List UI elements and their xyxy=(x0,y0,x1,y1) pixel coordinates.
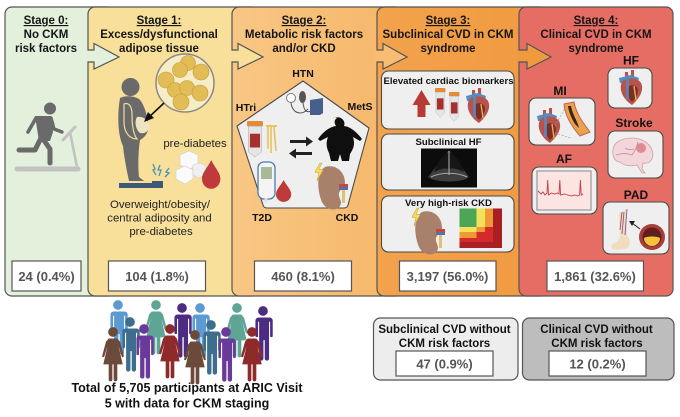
arrow: Stage 3 to Stage 4 xyxy=(518,44,551,69)
label: Stroke: Stroke xyxy=(615,116,653,130)
icon: heart xyxy=(537,108,560,143)
label: HTri: HTri xyxy=(236,102,256,114)
panel: clinical CVD without risk factors xyxy=(522,318,674,380)
icon: leg with arteries xyxy=(611,209,630,250)
Stage 4 count: 1,861 (32.6%) xyxy=(554,269,636,284)
icon: heart xyxy=(466,88,489,123)
Stage 2 heading: Metabolic risk factors xyxy=(245,29,363,41)
panel: subclinical CVD without risk factors xyxy=(374,318,518,380)
icon: exchange arrows xyxy=(289,136,313,158)
label: PAD: PAD xyxy=(624,188,649,202)
card: PAD xyxy=(603,188,669,254)
panel: Stage 1 xyxy=(86,7,258,296)
arrow: Stage 2 to Stage 3 xyxy=(376,44,407,69)
panel: Stage 0 xyxy=(5,7,115,296)
card label: Elevated cardiac biomarkers xyxy=(383,76,514,87)
Stage 3 heading: Subclinical CVD in CKM xyxy=(382,29,514,41)
panel heading: CKM risk factors xyxy=(399,338,490,350)
arrow: magnified adipose to abdomen xyxy=(144,103,164,122)
caption: total participants: 5 with data for CKM staging xyxy=(105,396,269,410)
caption: total participants: Total of 5,705 participants at ARIC Visit xyxy=(71,381,303,395)
Stage 2 heading: Stage 2: xyxy=(282,15,326,27)
card label: Subclinical HF xyxy=(415,137,482,148)
label: pre-diabetes: pre-diabetes xyxy=(163,138,227,150)
icon: kidney xyxy=(315,163,348,209)
Stage 3 count xyxy=(400,261,496,291)
count xyxy=(549,351,646,376)
icon: blood tube and lipids xyxy=(247,121,277,157)
count: 47 (0.9%) xyxy=(416,356,473,372)
Stage 3 count: 3,197 (56.0%) xyxy=(407,269,488,284)
Stage 2 count: 460 (8.1%) xyxy=(271,269,335,284)
label: MetS: MetS xyxy=(347,101,373,113)
icon: blocked artery xyxy=(554,102,590,138)
panel: Stage 4 xyxy=(517,7,673,296)
Stage 1 count: 104 (1.8%) xyxy=(125,269,189,284)
Stage 2 heading: and/or CKD xyxy=(272,43,336,55)
card: AF xyxy=(532,152,597,214)
Stage 1 heading: adipose tissue xyxy=(119,43,199,55)
Stage 4 count xyxy=(547,261,644,291)
label: MI: MI xyxy=(553,84,567,98)
card: HF xyxy=(608,54,652,108)
icon: artery cross section xyxy=(629,221,665,250)
icon: participants group xyxy=(102,300,273,384)
Stage 0 count: 24 (0.4%) xyxy=(18,269,75,284)
panel heading: CKM risk factors xyxy=(551,338,643,350)
Stage 2 count xyxy=(254,261,352,291)
icon: treadmill runner xyxy=(17,102,78,169)
Stage 1 heading: Stage 1: xyxy=(137,15,181,27)
icon: sugar cubes and blood drop xyxy=(176,151,220,189)
Stage 4 heading: Clinical CVD in CKM xyxy=(540,29,652,41)
icon: ECG strip xyxy=(537,171,591,210)
icon: heart xyxy=(619,70,642,105)
Stage 4 heading: syndrome xyxy=(569,43,623,55)
card: subclinical HF xyxy=(382,134,514,190)
caption: overweight and pre-diabetes: central adiposity and xyxy=(107,213,212,225)
Stage 0 heading: No CKM xyxy=(24,29,68,41)
caption: overweight and pre-diabetes: pre-diabetes xyxy=(129,226,193,238)
icon: up arrow xyxy=(412,90,430,117)
panel: Stage 3 xyxy=(375,7,547,296)
panel: Stage 2 xyxy=(230,7,402,296)
echocardiogram image xyxy=(421,148,477,188)
count xyxy=(396,351,493,376)
icon: brain xyxy=(613,138,653,173)
icon: obese silhouette xyxy=(318,117,362,161)
label: HF: HF xyxy=(623,54,639,68)
label: CKD: CKD xyxy=(336,212,359,224)
Stage 0 count xyxy=(12,261,81,291)
panel heading: Clinical CVD without xyxy=(540,324,653,336)
arrow: Stage 0 to Stage 1 xyxy=(88,44,119,69)
Stage 1 heading: Excess/dysfunctional xyxy=(100,29,218,41)
count: 12 (0.2%) xyxy=(569,356,626,372)
Stage 0 heading: Stage 0: xyxy=(24,15,68,27)
icon: blood pressure cuff xyxy=(286,91,323,115)
label: HTN: HTN xyxy=(292,68,314,80)
Stage 1 count xyxy=(108,261,206,291)
card label: Very high-risk CKD xyxy=(405,198,492,209)
icon: kidney xyxy=(412,208,445,254)
card: elevated cardiac biomarkers xyxy=(382,71,514,129)
icon: blood tubes xyxy=(435,88,459,121)
Stage 3 heading: syndrome xyxy=(421,43,475,55)
pentagon of metabolic risk factors xyxy=(236,68,373,224)
panel heading: Subclinical CVD without xyxy=(378,324,511,336)
Stage 4 heading: Stage 4: xyxy=(574,15,618,27)
icon: glucose meter and drop xyxy=(258,162,291,202)
Stage 0 heading: risk factors xyxy=(15,43,77,55)
icon: person with excess adipose tissue on scale xyxy=(118,78,169,188)
risk heat map xyxy=(460,208,502,248)
Stage 3 heading: Stage 3: xyxy=(426,15,470,27)
arrow: Stage 1 to Stage 2 xyxy=(232,44,263,69)
label: T2D: T2D xyxy=(252,212,272,224)
icon: adipose tissue magnified xyxy=(156,54,214,112)
card: MI xyxy=(529,84,595,145)
card: very high-risk CKD xyxy=(382,196,514,254)
card: Stroke xyxy=(608,116,663,178)
caption: overweight and pre-diabetes: Overweight/obesity/ xyxy=(110,199,211,211)
label: AF: AF xyxy=(556,152,572,166)
